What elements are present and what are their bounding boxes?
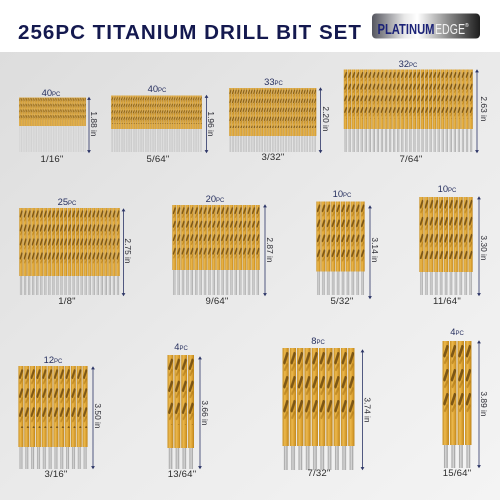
count: 40PC: [148, 83, 167, 94]
drill bits: 12pc 3/16: [18, 366, 88, 469]
size: 7/32": [307, 468, 331, 479]
drill bits: 40pc 5/64: [111, 96, 202, 152]
count: 40PC: [42, 87, 61, 98]
count: 10PC: [333, 188, 352, 199]
arrow: [205, 96, 208, 152]
logo: Platinum Edge: [372, 14, 480, 38]
arrow: [92, 367, 94, 468]
length: 2.75 in: [123, 238, 133, 264]
count: 12PC: [44, 354, 63, 365]
length: 3.30 in: [479, 235, 489, 261]
logo: Platinum Edge: PLATINUM: [378, 22, 434, 38]
logo: Platinum Edge: ®: [465, 22, 469, 29]
panel: 7/32 inch bits: [282, 335, 372, 479]
count: 32PC: [399, 58, 418, 69]
length: 3.66 in: [200, 400, 210, 426]
count: 20PC: [206, 193, 225, 204]
length: 3.14 in: [370, 237, 380, 263]
drill bits: 8pc 7/32: [282, 348, 355, 470]
drill bits: 4pc 13/64: [167, 355, 194, 469]
panel: 11/64 inch bits: [419, 183, 489, 307]
size: 13/64": [168, 469, 196, 480]
title: 256PC TITANIUM DRILL BIT SET: [18, 21, 361, 44]
size: 11/64": [433, 296, 461, 307]
panel: 5/32 inch bits: [316, 188, 380, 307]
drill bits: 40pc 1/16: [19, 98, 86, 152]
drill bits: 10pc 5/32: [316, 202, 365, 295]
drill bits: 33pc 3/32: [229, 88, 316, 152]
length: 3.89 in: [479, 391, 489, 417]
arrow: [122, 209, 125, 296]
panel: 15/64 inch bits: [442, 326, 489, 479]
panel: 5/64 inch bits: [111, 83, 216, 165]
count: 4PC: [450, 326, 464, 337]
panel: 1/16 inch bits: [19, 87, 99, 165]
drill bits: 20pc 9/64: [172, 205, 260, 295]
size: 1/16": [40, 154, 64, 165]
arrow: [478, 197, 480, 296]
size: 1/8": [58, 296, 76, 307]
size: 9/64": [205, 296, 229, 307]
arrow: [369, 206, 371, 298]
size: 3/16": [44, 469, 68, 480]
length: 1.96 in: [206, 111, 216, 137]
length: 2.20 in: [321, 106, 331, 132]
size: 5/64": [146, 154, 170, 165]
panel: 3/16 inch bits: [18, 354, 103, 480]
length: 2.87 in: [265, 237, 275, 263]
arrow: [199, 357, 201, 468]
drill bits: 4pc 15/64: [442, 341, 472, 468]
logo: Platinum Edge: EDGE: [435, 22, 465, 38]
count: 25PC: [58, 196, 77, 207]
drill bits: 10pc 11/64: [419, 197, 473, 295]
count: 10PC: [438, 183, 457, 194]
size: 7/64": [399, 154, 423, 165]
arrow: [264, 205, 266, 296]
arrow: [319, 88, 322, 152]
arrow: [478, 341, 480, 468]
panel: 13/64 inch bits: [167, 341, 210, 480]
panel: 1/8 inch bits: [19, 196, 133, 307]
length: 1.88 in: [89, 111, 99, 137]
length: 3.74 in: [362, 397, 372, 423]
count: 4PC: [174, 341, 188, 352]
arrow: [88, 98, 90, 152]
drill bits: 25pc 1/8: [19, 208, 120, 295]
count: 8PC: [311, 335, 325, 346]
length: 3.50 in: [93, 403, 103, 429]
panel: 7/64 inch bits: [344, 58, 489, 165]
length: 2.63 in: [479, 96, 489, 122]
size: 5/32": [330, 296, 354, 307]
arrow: [361, 350, 364, 470]
count: 33PC: [264, 76, 284, 87]
size: 3/32": [261, 152, 285, 163]
panel: 3/32 inch bits: [229, 76, 331, 163]
drill bits: 32pc 7/64: [344, 70, 473, 152]
panel: 9/64 inch bits: [172, 193, 275, 307]
arrow: [476, 70, 478, 152]
size: 15/64": [443, 468, 471, 479]
